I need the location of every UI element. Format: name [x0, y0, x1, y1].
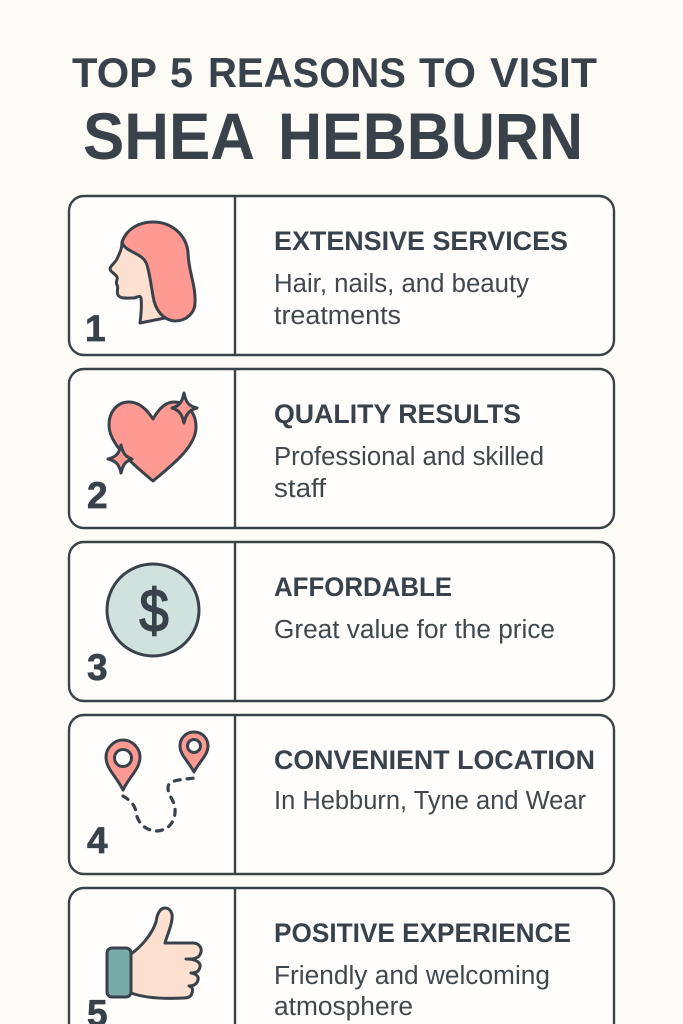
panel: reason 5 [69, 888, 614, 1024]
description: atmosphere [274, 993, 413, 1021]
panel: reason 2 [69, 369, 614, 528]
heading: AFFORDABLE [274, 572, 452, 602]
panel: reason 1 [69, 196, 614, 355]
title [72, 49, 597, 173]
description [274, 443, 544, 503]
description: Hair, nails, and beauty [274, 270, 529, 298]
description: Professional and skilled [274, 443, 544, 471]
description: staff [274, 475, 327, 503]
heading: CONVENIENT LOCATION [274, 745, 595, 775]
icon: dollar coin: $ [139, 577, 169, 644]
panel: reason 4 [69, 715, 614, 874]
heading: QUALITY RESULTS [274, 399, 521, 429]
icon: woman's head with hair [110, 222, 195, 323]
icon: map pins with dashed route [106, 732, 208, 831]
title: TO [419, 49, 476, 96]
description: In Hebburn, Tyne and Wear [274, 787, 587, 815]
heading: EXTENSIVE SERVICES [274, 226, 568, 256]
description: Great value for the price [274, 616, 555, 644]
description [274, 962, 550, 1021]
panel: reason 3 [69, 542, 614, 701]
number 1: 1 [85, 308, 106, 349]
title: TOP [72, 49, 157, 96]
title: SHEA [83, 99, 255, 173]
title: VISIT [490, 49, 597, 96]
number 4: 4 [87, 820, 108, 861]
number 3: 3 [87, 647, 108, 688]
icon: thumbs up [107, 908, 201, 998]
icon: dollar coin [107, 564, 199, 656]
description: Friendly and welcoming [274, 962, 550, 990]
title: HEBBURN [278, 99, 583, 173]
description: treatments [274, 302, 401, 330]
icon: heart with sparkles [108, 393, 197, 481]
number 2: 2 [87, 475, 108, 516]
title: 5 [170, 49, 193, 96]
title: REASONS [208, 49, 406, 96]
description [274, 270, 529, 330]
heading: POSITIVE EXPERIENCE [274, 918, 571, 948]
